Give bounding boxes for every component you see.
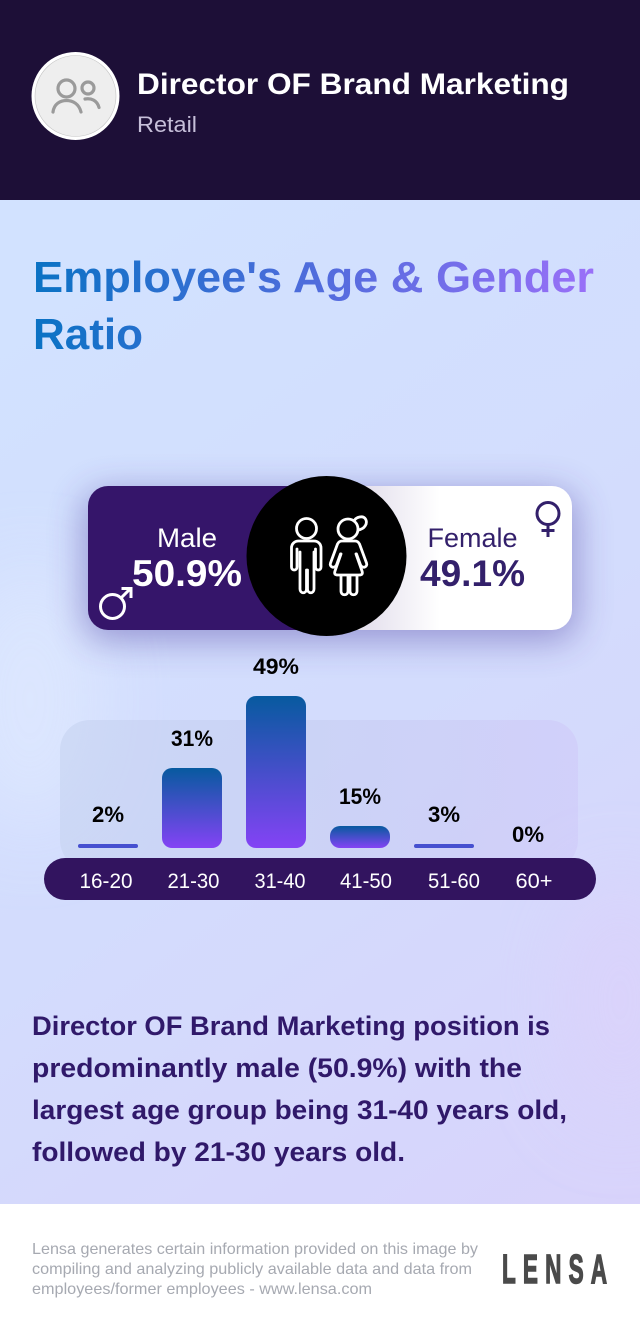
bar 16-20: 2% xyxy=(92,802,124,827)
summary text: followed by 21-30 years old. xyxy=(32,1137,405,1167)
heading xyxy=(33,253,594,359)
icon: male figure xyxy=(292,518,321,593)
job title: Director OF Brand Marketing xyxy=(137,68,569,101)
logo: LENSA: LENSA xyxy=(502,1247,607,1293)
icon: female symbol xyxy=(537,502,559,537)
bar 51-60: 3% xyxy=(428,802,460,827)
center circle with figures xyxy=(246,476,406,636)
industry label: Retail xyxy=(137,112,197,137)
icon: male symbol xyxy=(100,588,131,618)
age axis pill: 60+ xyxy=(516,870,552,893)
bar 31-40 xyxy=(246,654,306,848)
bar 31-40: 49% xyxy=(253,654,299,679)
summary text: Director OF Brand Marketing position is xyxy=(32,1011,550,1041)
female label: Female xyxy=(428,523,518,553)
bar 41-50 xyxy=(330,784,390,848)
heading: Employee's Age & Gender xyxy=(33,253,594,302)
age axis pill: 21-30 xyxy=(168,870,220,893)
summary text: largest age group being 31-40 years old, xyxy=(32,1095,567,1125)
bar chart: age distribution xyxy=(78,654,544,848)
bar 60+: 0% xyxy=(512,822,544,847)
header band xyxy=(0,0,640,200)
bar 16-20 xyxy=(78,802,138,848)
age axis pill: 51-60 xyxy=(428,870,480,893)
disclaimer text: Lensa generates certain information provided on this image by xyxy=(32,1241,478,1258)
disclaimer text: compiling and analyzing publicly available data and data from xyxy=(32,1261,472,1278)
bar 41-50: 15% xyxy=(339,784,381,809)
panel: female xyxy=(300,486,572,630)
panel: age chart backdrop xyxy=(60,720,578,870)
panel: gender ratio xyxy=(84,476,576,640)
age axis pill xyxy=(44,858,596,900)
icon: people avatar xyxy=(32,52,120,140)
age axis pill: 31-40 xyxy=(254,870,306,893)
heading: Ratio xyxy=(33,310,143,359)
age axis pill: 41-50 xyxy=(340,870,392,893)
summary text: predominantly male (50.9%) with the xyxy=(32,1053,522,1083)
bar 21-30 xyxy=(162,726,222,848)
age axis pill: 16-20 xyxy=(80,870,132,893)
male label: Male xyxy=(157,523,217,553)
disclaimer text: employees/former employees - www.lensa.com xyxy=(32,1281,372,1298)
summary text xyxy=(32,1011,567,1167)
panel: male xyxy=(88,486,320,630)
page background xyxy=(0,200,640,1204)
male percentage: 50.9% xyxy=(132,553,242,594)
female percentage: 49.1% xyxy=(420,553,525,594)
bar 51-60 xyxy=(414,802,474,848)
icon: female figure xyxy=(330,517,367,595)
footer xyxy=(0,1204,640,1332)
disclaimer text xyxy=(32,1241,478,1298)
bar 21-30: 31% xyxy=(171,726,213,751)
